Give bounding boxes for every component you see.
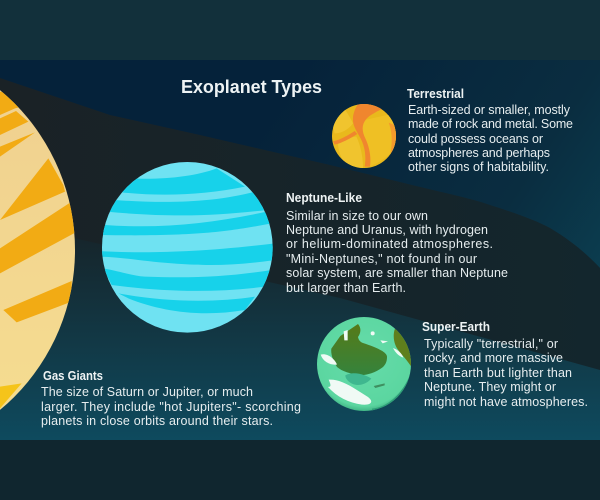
description: gas giants: larger. They include "hot Jupiters"- scorching xyxy=(41,400,301,414)
description: gas giants xyxy=(41,385,301,428)
heading: neptune-like: Neptune-Like xyxy=(286,191,362,205)
description: terrestrial: could possess oceans or xyxy=(408,132,543,146)
description: super-earth: than Earth but lighter than xyxy=(424,366,572,380)
description: super-earth: might not have atmospheres. xyxy=(424,395,588,409)
description: super-earth: rocky, and more massive xyxy=(424,351,563,365)
title: Exoplanet Types xyxy=(181,77,322,97)
description: super-earth: Typically "terrestrial," or xyxy=(424,337,558,351)
planet: gas giant xyxy=(0,90,75,410)
description: terrestrial: atmospheres and perhaps xyxy=(408,146,550,160)
description: super-earth: Neptune. They might or xyxy=(424,380,556,394)
planet: terrestrial xyxy=(332,104,396,168)
heading: super-earth: Super-Earth xyxy=(422,320,490,334)
panel text: neptune-like xyxy=(286,191,508,295)
top band xyxy=(0,0,600,60)
description: neptune-like xyxy=(286,209,508,295)
planet: neptune-like xyxy=(98,162,275,333)
description: neptune-like: "Mini-Neptunes," not found in our xyxy=(286,252,477,266)
description: terrestrial xyxy=(408,103,573,174)
description: super-earth xyxy=(424,337,588,409)
bottom band xyxy=(0,440,600,500)
description: terrestrial: other signs of habitability. xyxy=(408,160,549,174)
description: neptune-like: or helium-dominated atmospheres. xyxy=(286,237,493,251)
description: neptune-like: Neptune and Uranus, with hydrogen xyxy=(286,223,488,237)
description: gas giants: The size of Saturn or Jupiter, or much xyxy=(41,385,253,399)
panel text: super-earth xyxy=(422,320,588,409)
description: terrestrial: Earth-sized or smaller, mostly xyxy=(408,103,571,117)
description: neptune-like: Similar in size to our own xyxy=(286,209,428,223)
description: neptune-like: but larger than Earth. xyxy=(286,281,406,295)
heading: terrestrial: Terrestrial xyxy=(407,87,464,101)
description: neptune-like: solar system, are smaller than Neptune xyxy=(286,266,508,280)
panel text: terrestrial xyxy=(407,87,573,174)
planet: super-earth xyxy=(317,317,415,412)
heading: gas giants: Gas Giants xyxy=(43,369,103,383)
panel text: gas giants xyxy=(41,369,301,428)
description: gas giants: planets in close orbits around their stars. xyxy=(41,414,273,428)
main background panel xyxy=(0,60,600,440)
description: terrestrial: made of rock and metal. Some xyxy=(408,117,573,131)
